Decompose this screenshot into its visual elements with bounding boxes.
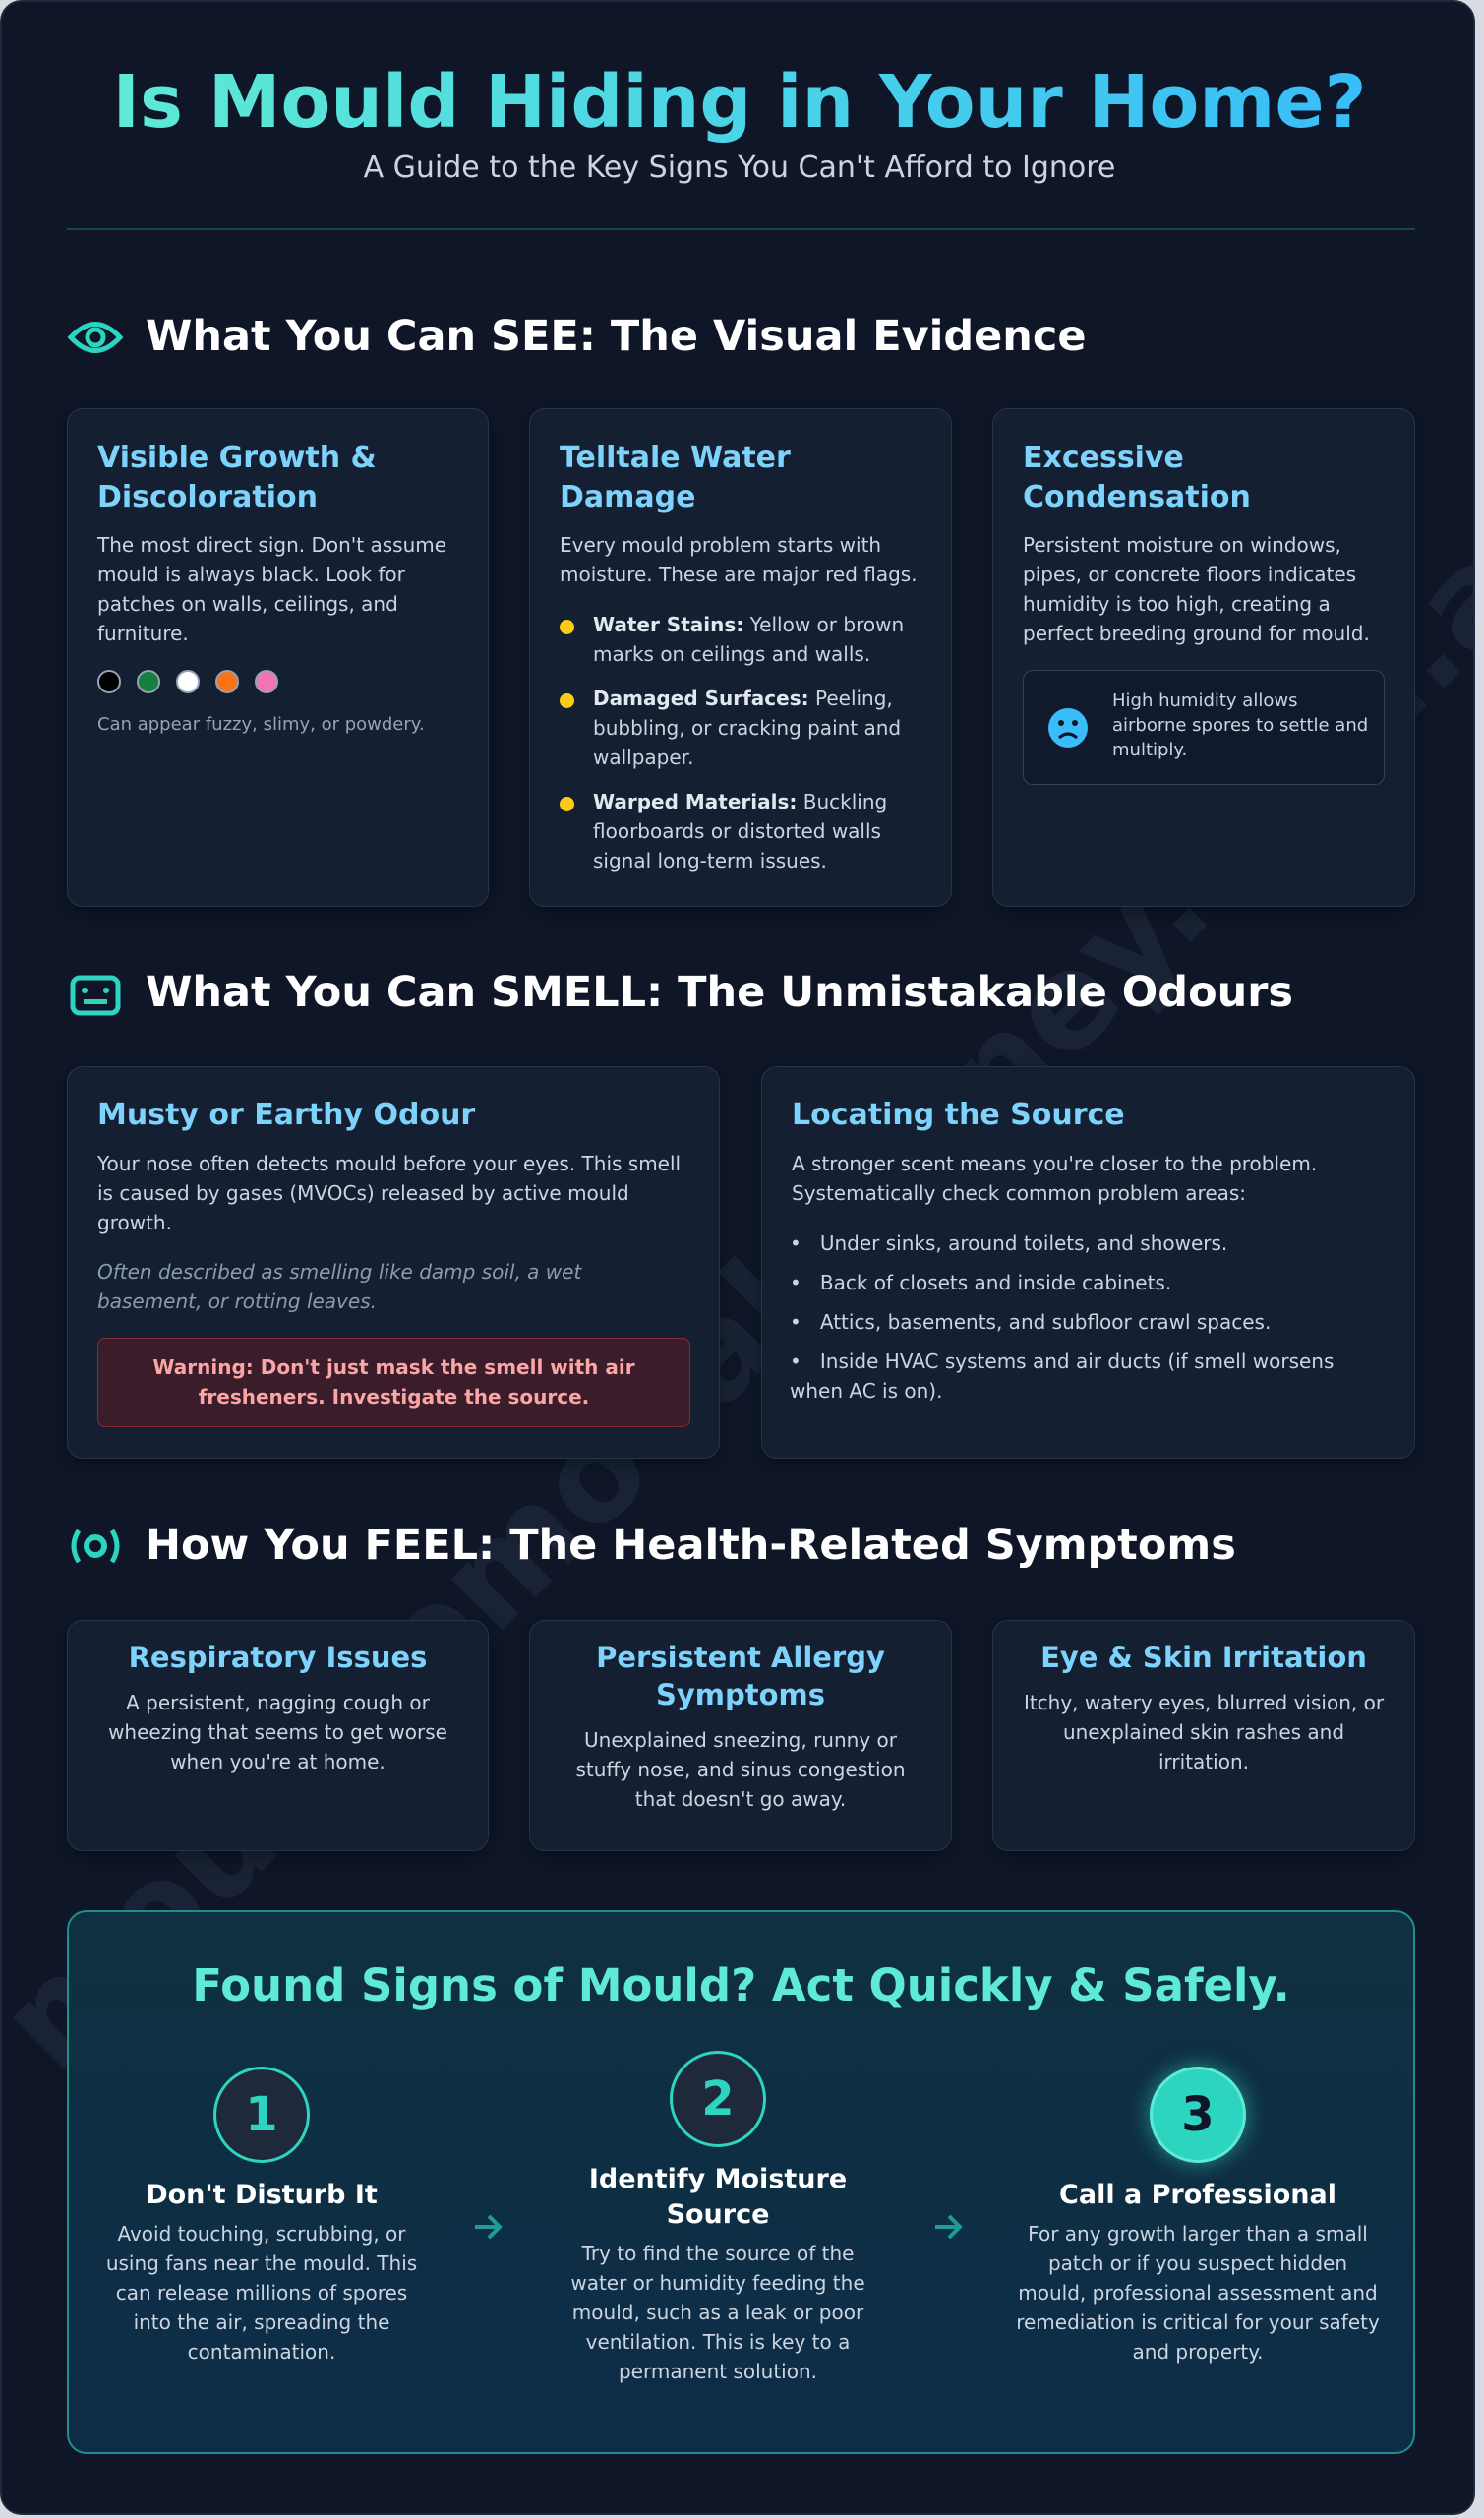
circle 2: 2 [701, 2071, 735, 2127]
heading: feel: How You FEEL: The Health-Related Symptoms [146, 1521, 1236, 1570]
card body: A persistent, nagging cough or wheezing that seems to get worse when you're at home. [108, 1691, 447, 1773]
circle 3: 3 [1181, 2087, 1215, 2142]
note: Can appear fuzzy, slimy, or powdery. [97, 714, 425, 735]
icon: broadcast [71, 1529, 120, 1564]
panel: water damage [529, 408, 952, 907]
step body: mould, professional assessment and [1018, 2281, 1378, 2305]
subtitle: A Guide to the Key Signs You Can't Afford to Ignore [364, 150, 1115, 185]
heading: smell: What You Can SMELL: The Unmistakable Odours [146, 968, 1293, 1017]
card body: Itchy, watery eyes, blurred vision, or unexplained skin rashes and irritation. [1024, 1691, 1384, 1773]
bullet list [560, 613, 904, 872]
card title: Musty or Earthy Odour [97, 1098, 475, 1132]
bullet list [790, 1231, 1334, 1403]
card body: Every mould problem starts with moisture. These are major red flags. [560, 533, 918, 586]
bullet list: Warped Materials: Buckling floorboards or distorted walls signal long-term issues. [593, 790, 887, 872]
callout: humidity [1023, 670, 1385, 785]
callout text: High humidity allows airborne spores to settle and multiply. [1112, 690, 1368, 760]
circle 1 [213, 2067, 310, 2163]
card title: Excessive Condensation [1023, 441, 1251, 514]
circle 2 [670, 2051, 766, 2147]
panel: musty odour [67, 1066, 720, 1459]
title: Is Mould Hiding in Your Home? [112, 60, 1367, 145]
bullet list: • Under sinks, around toilets, and showers. [790, 1231, 1227, 1255]
icon: eye [67, 322, 124, 353]
step 2 [570, 2051, 865, 2383]
card title: Locating the Source [792, 1098, 1125, 1132]
bullet list: • Back of closets and inside cabinets. [790, 1271, 1171, 1294]
card body: Persistent moisture on windows, pipes, or concrete floors indicates humidity is too high, creating a perfect breeding ground for mould. [1023, 533, 1370, 645]
bullet list: • Inside HVAC systems and air ducts (if smell worsens when AC is on). [790, 1349, 1334, 1403]
panel: respiratory [67, 1620, 489, 1851]
bullet list: Damaged Surfaces: Peeling, bubbling, or cracking paint and wallpaper. [593, 687, 901, 769]
step body: Avoid touching, scrubbing, or using fans near the mould. This can release millions of spores into the air, spreading the contamination. [106, 2222, 417, 2364]
step title: Identify Moisture Source [589, 2164, 847, 2230]
colour swatches [97, 670, 278, 693]
panel: visible growth [67, 408, 489, 907]
card title: Eye & Skin Irritation [1040, 1641, 1367, 1674]
card body: The most direct sign. Don't assume mould is always black. Look for patches on walls, ceilings, and furniture. [97, 533, 446, 645]
circle 3 [1150, 2067, 1246, 2163]
step title: Don't Disturb It [146, 2180, 378, 2210]
circle 1: 1 [245, 2087, 278, 2142]
card body: A stronger scent means you're closer to the problem. Systematically check common problem areas: [792, 1152, 1317, 1205]
step body: Try to find the source of the water or humidity feeding the mould, such as a leak or poor ventilation. This is key to a permanent solution. [570, 2242, 865, 2383]
card body: Your nose often detects mould before your eyes. This smell is caused by gases (MVOCs) released by active mould growth. [97, 1152, 681, 1234]
panel: condensation [992, 408, 1415, 907]
card title: Telltale Water Damage [560, 441, 791, 514]
panel: allergy [529, 1620, 952, 1851]
step body [1016, 2222, 1380, 2364]
bullet list: Water Stains: Yellow or brown marks on ceilings and walls. [593, 613, 904, 666]
step 3 [1016, 2054, 1380, 2364]
icon: sad face [1048, 708, 1088, 748]
step title: Call a Professional [1059, 2180, 1336, 2210]
arrow 1 [475, 2215, 503, 2239]
step body: For any growth larger than a small [1028, 2222, 1368, 2246]
bullet list: • Attics, basements, and subfloor crawl spaces. [790, 1310, 1271, 1334]
card title: Respiratory Issues [129, 1641, 427, 1674]
card title: Visible Growth & Discoloration [97, 441, 377, 514]
warning box: Warning: Don't just mask the smell with air fresheners. Investigate the source. [152, 1355, 635, 1409]
arrow 2 [935, 2215, 963, 2239]
warning box [97, 1338, 690, 1427]
cta title: Found Signs of Mould? Act Quickly & Safely. [192, 1959, 1290, 2011]
panel: locating source [761, 1066, 1415, 1459]
step body: and property. [1132, 2340, 1264, 2364]
card body: Unexplained sneezing, runny or stuffy nose, and sinus congestion that doesn't go away. [576, 1728, 905, 1811]
panel: eye & skin [992, 1620, 1415, 1851]
heading: see: What You Can SEE: The Visual Evidence [146, 312, 1087, 361]
step body: remediation is critical for your safety [1016, 2310, 1380, 2334]
step 1 [106, 2067, 417, 2364]
panel: call to action [67, 1910, 1415, 2454]
icon: nose box [71, 976, 120, 1015]
step body: patch or if you suspect hidden [1048, 2251, 1347, 2275]
italic note: Often described as smelling like damp soil, a wet basement, or rotting leaves. [97, 1260, 581, 1313]
card title: Persistent Allergy Symptoms [596, 1641, 885, 1711]
